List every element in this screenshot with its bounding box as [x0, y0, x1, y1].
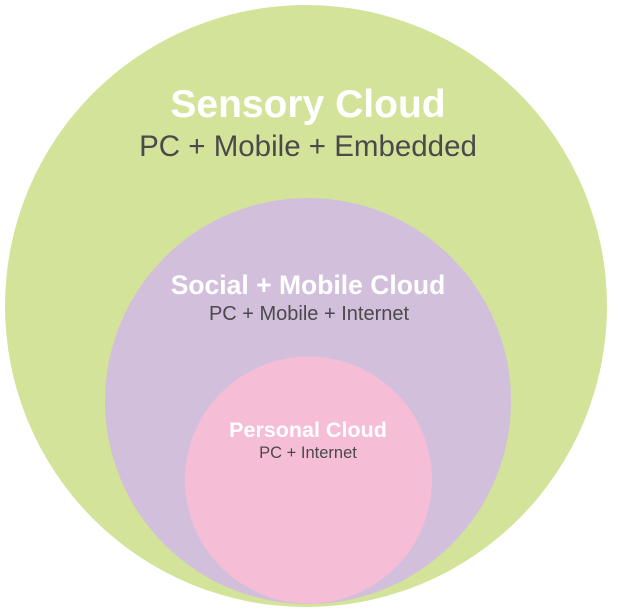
heading: Personal Cloud: Personal Cloud	[229, 418, 387, 442]
subtitle: PC + Internet: PC + Internet	[259, 444, 357, 462]
circle: personal cloud	[185, 356, 432, 604]
subtitle: PC + Mobile + Internet: PC + Mobile + Internet	[209, 303, 409, 325]
title: Sensory Cloud: Sensory Cloud	[170, 83, 446, 126]
heading: Social + Mobile Cloud: Social + Mobile Cloud	[171, 270, 445, 300]
subtitle: PC + Mobile + Embedded: PC + Mobile + Embedded	[139, 130, 477, 163]
